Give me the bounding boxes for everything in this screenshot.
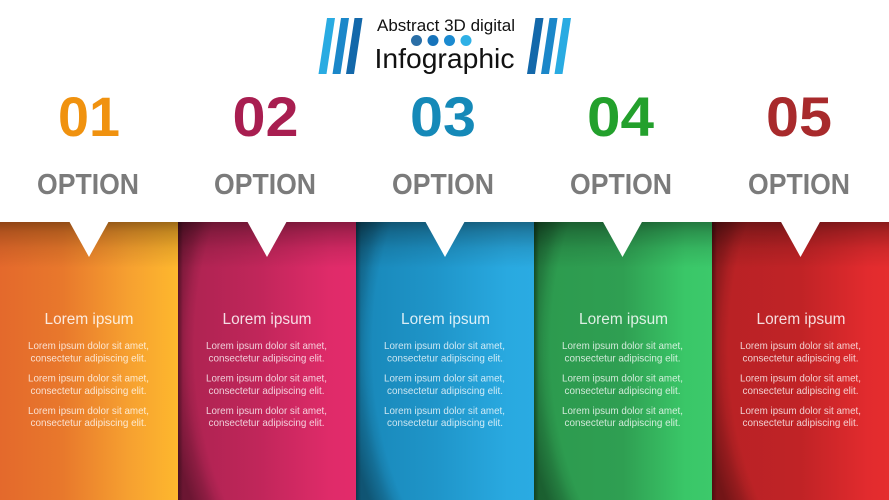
text block: Lorem ipsum <box>222 311 312 328</box>
text block: consectetur adipiscing elit. <box>564 352 680 364</box>
text block: Lorem ipsum dolor sit amet, <box>206 372 327 384</box>
text block: consectetur adipiscing elit. <box>30 385 146 397</box>
text block: consectetur adipiscing elit. <box>387 417 503 429</box>
icon: left slashes <box>318 18 362 74</box>
number 02: 02 <box>232 85 298 148</box>
text block: Lorem ipsum dolor sit amet, <box>28 340 149 352</box>
text block: Lorem ipsum dolor sit amet, <box>740 372 861 384</box>
icon: four dots <box>411 35 472 46</box>
icon: right slashes <box>527 18 571 74</box>
text block: consectetur adipiscing elit. <box>208 385 324 397</box>
text block: consectetur adipiscing elit. <box>742 385 858 397</box>
text block: Lorem ipsum dolor sit amet, <box>28 405 149 417</box>
text block: consectetur adipiscing elit. <box>742 352 858 364</box>
text block: Lorem ipsum <box>756 311 846 328</box>
text block: Lorem ipsum dolor sit amet, <box>206 405 327 417</box>
text block: Lorem ipsum dolor sit amet, <box>562 405 683 417</box>
number 01: 01 <box>58 85 120 148</box>
label: option 5: OPTION <box>748 169 850 201</box>
pointer notch <box>780 221 820 257</box>
pointer notch <box>69 221 109 257</box>
text block <box>206 311 327 429</box>
text block: Lorem ipsum dolor sit amet, <box>384 340 505 352</box>
number 04: 04 <box>587 85 654 148</box>
panel: green <box>534 222 712 500</box>
text block: consectetur adipiscing elit. <box>564 417 680 429</box>
text block: Lorem ipsum dolor sit amet, <box>28 372 149 384</box>
text block <box>740 311 861 429</box>
label: option 3: OPTION <box>392 169 494 201</box>
text block: consectetur adipiscing elit. <box>208 352 324 364</box>
text block: Lorem ipsum <box>401 311 490 328</box>
number 05: 05 <box>766 85 832 148</box>
text block: consectetur adipiscing elit. <box>564 385 680 397</box>
panel: blue <box>356 222 534 500</box>
text block <box>562 311 683 429</box>
panel: orange <box>0 222 178 500</box>
text block: Lorem ipsum dolor sit amet, <box>384 405 505 417</box>
label: option 4: OPTION <box>570 169 672 201</box>
text block: Lorem ipsum dolor sit amet, <box>740 405 861 417</box>
pointer notch <box>425 221 465 257</box>
text block: consectetur adipiscing elit. <box>208 417 324 429</box>
title: Infographic: Infographic <box>374 43 514 74</box>
pointer notch <box>602 221 642 257</box>
header area <box>37 16 850 201</box>
panel: magenta <box>178 222 356 500</box>
label: option 2: OPTION <box>214 169 316 201</box>
pointer notch <box>247 221 287 257</box>
text block: Lorem ipsum dolor sit amet, <box>740 340 861 352</box>
text block: Lorem ipsum dolor sit amet, <box>562 372 683 384</box>
title: Abstract 3D digital: Abstract 3D digital <box>377 16 515 35</box>
text block: consectetur adipiscing elit. <box>30 417 146 429</box>
text block: consectetur adipiscing elit. <box>387 385 503 397</box>
text block <box>384 311 505 429</box>
text block: consectetur adipiscing elit. <box>387 352 503 364</box>
label: option 1: OPTION <box>37 169 139 201</box>
text block <box>28 311 149 429</box>
panel: red <box>712 222 889 500</box>
text block: Lorem ipsum dolor sit amet, <box>562 340 683 352</box>
text block: Lorem ipsum <box>44 311 134 328</box>
number 03: 03 <box>410 85 476 148</box>
text block: Lorem ipsum dolor sit amet, <box>384 372 505 384</box>
text block: consectetur adipiscing elit. <box>742 417 858 429</box>
text block: Lorem ipsum <box>579 311 668 328</box>
text block: consectetur adipiscing elit. <box>30 352 146 364</box>
text block: Lorem ipsum dolor sit amet, <box>206 340 327 352</box>
